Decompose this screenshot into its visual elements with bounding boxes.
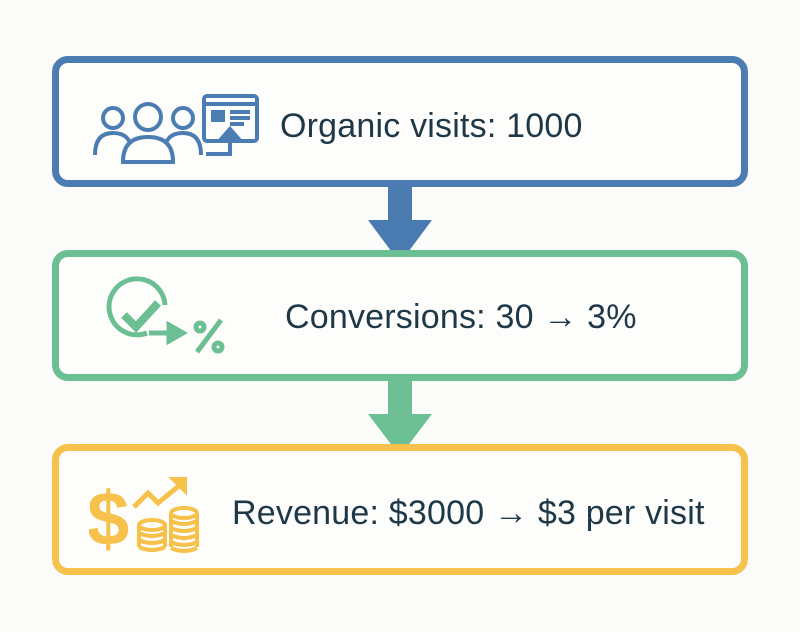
text: revenue: Revenue: $3000 → $3 per visit — [232, 494, 705, 532]
arrow: green down — [368, 381, 432, 444]
icon: dollar coins growth — [89, 477, 199, 560]
text: organic visits: Organic visits: 1000 — [280, 107, 583, 145]
text: conversions: Conversions: 30 → 3% — [285, 298, 637, 336]
panel: revenue — [52, 444, 748, 575]
panel: organic visits — [52, 56, 748, 187]
icon: check to percent — [106, 276, 224, 354]
icon: users and web page — [93, 94, 259, 164]
panel: conversions — [52, 250, 748, 381]
arrow: blue down — [368, 187, 432, 250]
